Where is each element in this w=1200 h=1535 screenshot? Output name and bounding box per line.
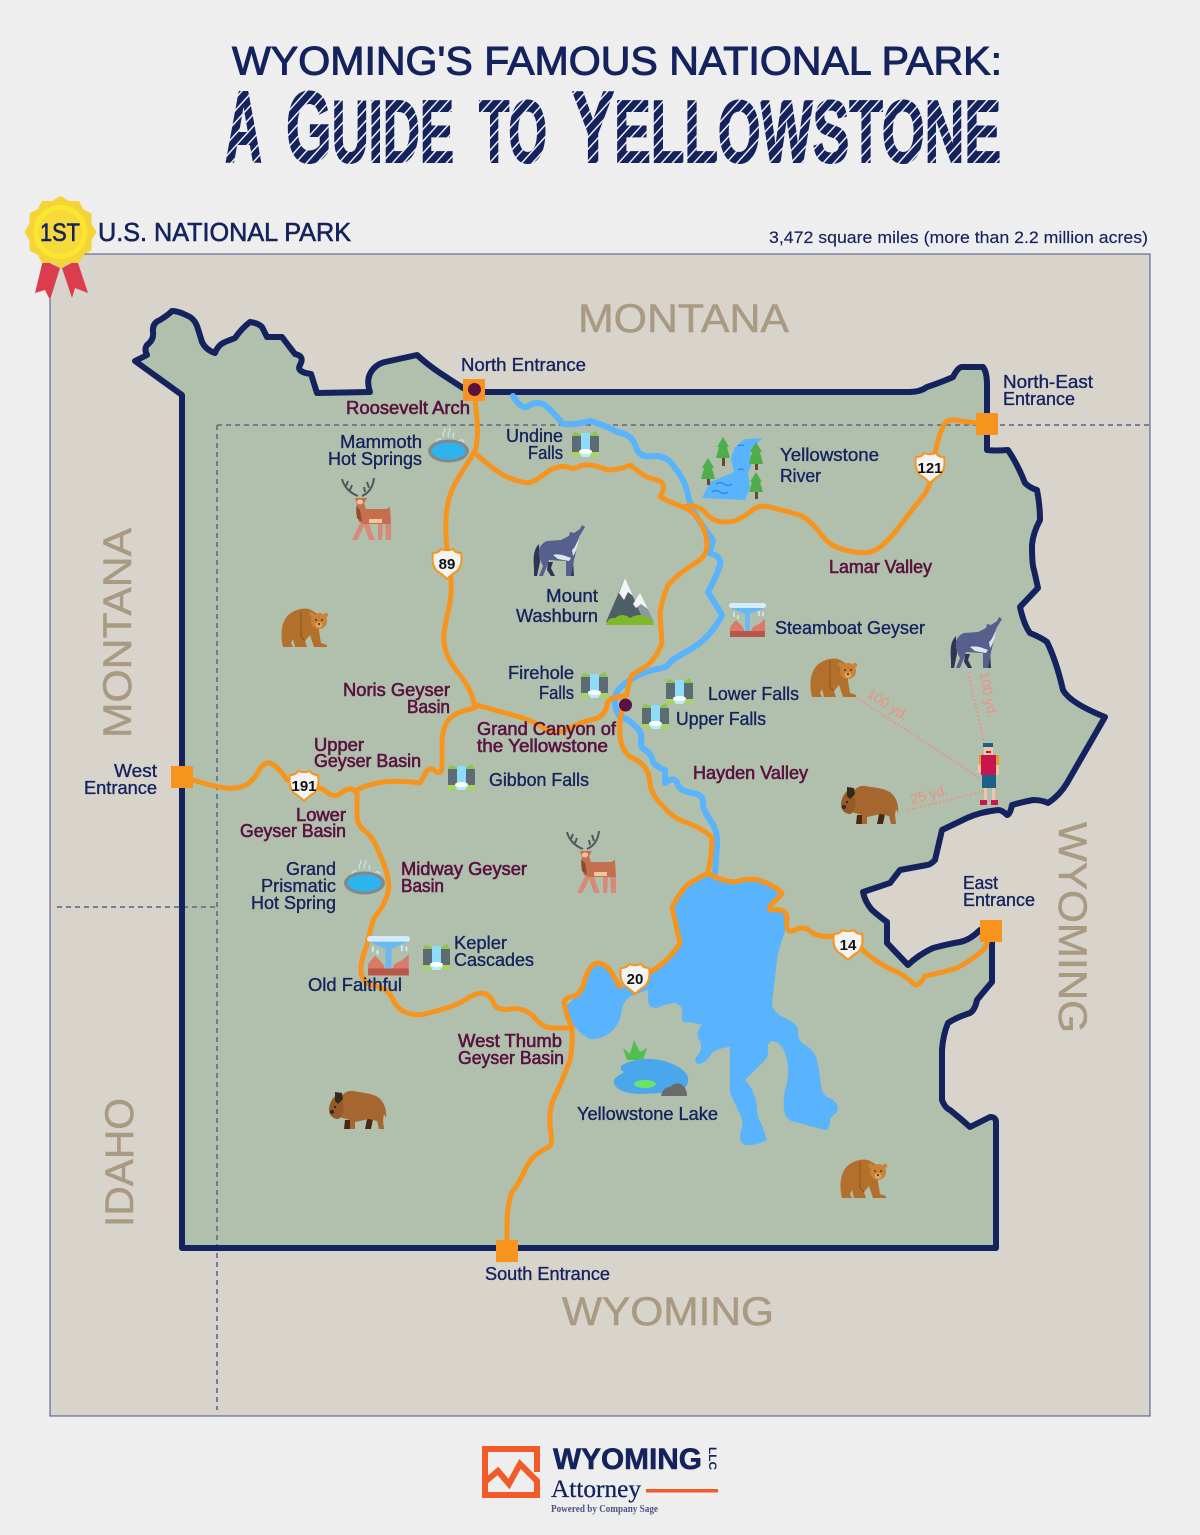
label: Lower Falls: Lower Falls [708,684,799,704]
label: bear distance: 100 yd. [864,685,912,724]
icon: waterfall Lower Falls [666,678,693,704]
shield 89 [432,549,462,579]
label: East Entrance [963,873,1035,910]
label: Firehole Falls: Firehole [508,663,574,683]
label: Mammoth Hot Springs [328,432,422,469]
marker: North Entrance [463,379,485,401]
road: Norris to Canyon and north loop [475,453,707,732]
label: Montana north: MONTANA [578,297,789,341]
icon: hiker [976,743,999,805]
label: Kepler Cascades [454,933,534,970]
label: Lower Geyser Basin: Lower [296,805,346,825]
icon: Yellowstone Lake scene [614,1040,688,1096]
label: Midway Geyser Basin: Midway Geyser [401,859,527,879]
label: wolf distance: 100 yd. [976,670,1001,719]
icon: geyser Old Faithful [367,936,410,975]
label: West Entrance [84,761,157,798]
label: Grand Prismatic Hot Spring: Hot Spring [251,893,336,913]
label: East Entrance: East [963,873,998,893]
label: West Thumb Geyser Basin: Geyser Basin [458,1048,564,1068]
logo tagline: Powered by Company Sage [551,1504,658,1515]
label: Lamar Valley: Lamar Valley [829,557,932,577]
icon: wolf central [534,525,585,576]
icon: river and trees [701,437,763,500]
label: Wyoming east: WYOMING [1050,822,1094,1033]
road network [193,390,990,1250]
label: Steamboat Geyser: Steamboat Geyser [775,618,925,638]
label: Yellowstone River: River [780,466,821,486]
icon: bear south [841,1160,887,1198]
label: West Thumb Geyser Basin: West Thumb [458,1031,562,1051]
icon: bison south-west [329,1091,386,1129]
label: Gibbon Falls: Gibbon Falls [489,770,589,790]
state border dashed lines [57,425,1150,1410]
shield 20: 20 [627,971,643,988]
label: South Entrance: South Entrance [485,1264,610,1284]
icon: hot spring Mammoth [428,428,469,462]
logo rule [646,1489,718,1492]
label: bison distance: 25 yd. [909,782,950,807]
shield 191 [290,771,318,801]
heading: U.S. national park: U.S. NATIONAL PARK [98,217,352,247]
label: Grand Canyon of the Yellowstone: the Yellowstone [477,736,608,756]
label: Idaho: IDAHO [98,1098,142,1227]
label: Roosevelt Arch: Roosevelt Arch [346,398,470,418]
line: bison to hiker [908,791,985,810]
label: North-East Entrance [1003,372,1093,409]
label: Upper Geyser Basin [314,735,421,771]
park boundary [135,311,1105,1248]
label: Lower Geyser Basin [240,805,346,841]
icon: bear east [811,659,857,697]
label: Undine Falls [506,426,563,463]
label: Midway Geyser Basin [401,859,527,896]
labels: natural features [251,426,925,1124]
state labels [96,297,1094,1334]
label: Kepler Cascades: Kepler [454,933,507,953]
road: north-east to Lamar Valley [683,420,987,553]
icon: waterfall Gibbon Falls [448,764,475,790]
shield 121: 121 [917,460,943,477]
label: Montana west: MONTANA [96,528,140,738]
label: Yellowstone River: Yellowstone [780,445,879,465]
label: North Entrance: North Entrance [461,355,586,375]
icon: deer north [342,478,391,540]
label: Noris Geyser Basin [343,680,450,717]
title line 2 [225,72,1001,184]
label: Grand Prismatic Hot Spring [251,859,336,913]
highway shields [290,453,944,994]
icon: first-park ribbon badge: 1ST [40,219,80,247]
label: Wyoming south: WYOMING [562,1290,774,1334]
icon: waterfall Kepler Cascades [423,944,450,970]
road: lower loop to west thumb [357,792,572,1250]
label: Upper Geyser Basin: Geyser Basin [314,751,421,771]
label: Firehole Falls [508,663,574,703]
title line 2: TO [479,82,547,181]
icon: bison east [841,786,898,824]
icon: hot spring Grand Prismatic [344,860,385,894]
icon: first-park ribbon badge [26,197,96,300]
label: Mount Washburn: Mount [546,586,598,606]
label: East Entrance: Entrance [963,890,1035,910]
park size note: 3,472 square miles (more than 2.2 million acres) [769,228,1148,247]
label: Mammoth Hot Springs: Hot Springs [328,449,422,469]
label: Yellowstone Lake: Yellowstone Lake [577,1104,718,1124]
icon: bear west [282,609,328,647]
entrances [171,379,1002,1262]
road: Canyon to lake [620,710,712,873]
label: West Entrance: Entrance [84,778,157,798]
label: North-East Entrance: Entrance [1003,389,1075,409]
logo mark [485,1449,537,1495]
label: Yellowstone River [780,445,879,486]
line: wolf to hiker [968,672,984,742]
marker: North-East Entrance [976,413,998,435]
shield 191: 191 [291,778,317,795]
label: Undine Falls: Undine [506,426,563,446]
label: Grand Canyon of the Yellowstone: Grand Canyon of [477,719,617,739]
panel: map background [50,254,1150,1416]
logo LLC: LLC [706,1447,718,1470]
shield 14: 14 [840,937,857,954]
label: Undine Falls: Falls [528,443,563,463]
label: Midway Geyser Basin: Basin [401,876,444,896]
label: Noris Geyser Basin: Noris Geyser [343,680,450,700]
label: West Entrance: West [114,761,157,781]
icon: waterfall Firehole Falls [581,672,608,698]
labels: valleys and basins [240,398,932,1068]
label: Firehole Falls: Falls [539,683,574,703]
title line 2: A [225,72,262,184]
icon: Mount Washburn mountain [606,578,654,625]
line: bear to hiker [857,698,980,778]
label: Mount Washburn [516,586,598,626]
logo: Wyoming LLC Attorney [485,1443,718,1515]
icon: geyser Steamboat [729,603,766,637]
label: West Thumb Geyser Basin [458,1031,564,1068]
marker: East Entrance [980,920,1002,942]
icon: waterfall Undine Falls [572,431,599,457]
icon: waterfall Upper Falls [642,703,669,729]
marker: South Entrance [496,1240,518,1262]
label: Grand Prismatic Hot Spring: Grand [286,859,336,879]
Yellowstone River [513,396,722,873]
title line 1: WYOMING'S FAMOUS NATIONAL PARK: [232,40,1002,84]
label: Noris Geyser Basin: Basin [407,697,450,717]
label: Hayden Valley: Hayden Valley [693,763,808,783]
shield 89: 89 [439,556,455,573]
marker: West Entrance [171,766,193,788]
labels: entrances [84,355,1093,1284]
label: Lower Geyser Basin: Geyser Basin [240,821,346,841]
label: Mount Washburn: Washburn [516,606,598,626]
label: Mammoth Hot Springs: Mammoth [340,432,422,452]
label: Old Faithful: Old Faithful [308,975,402,995]
shield 20 [620,964,650,994]
label: Upper Falls: Upper Falls [676,709,766,729]
shield 14 [834,930,862,960]
Yellowstone Lake water [566,873,838,1145]
label: Upper Geyser Basin: Upper [314,735,364,755]
park area fill [135,311,1105,1248]
label: Grand Canyon of the Yellowstone [477,719,617,756]
label: Kepler Cascades: Cascades [454,950,534,970]
distance lines [857,670,1001,810]
icon: deer central [567,831,616,893]
road: north entrance to west loop [193,390,478,796]
label: Grand Prismatic Hot Spring: Prismatic [261,876,336,896]
title [225,40,1002,184]
label: North-East Entrance: North-East [1003,372,1093,392]
icon: wolf east [951,617,1002,668]
road: lake north shore [564,873,990,1028]
marker: Canyon junction [619,698,632,712]
shield 121 [916,453,944,483]
title line 2: GUIDE [286,72,454,184]
logo Attorney: Attorney [551,1476,641,1503]
logo wordmark: WYOMING [553,1443,702,1476]
